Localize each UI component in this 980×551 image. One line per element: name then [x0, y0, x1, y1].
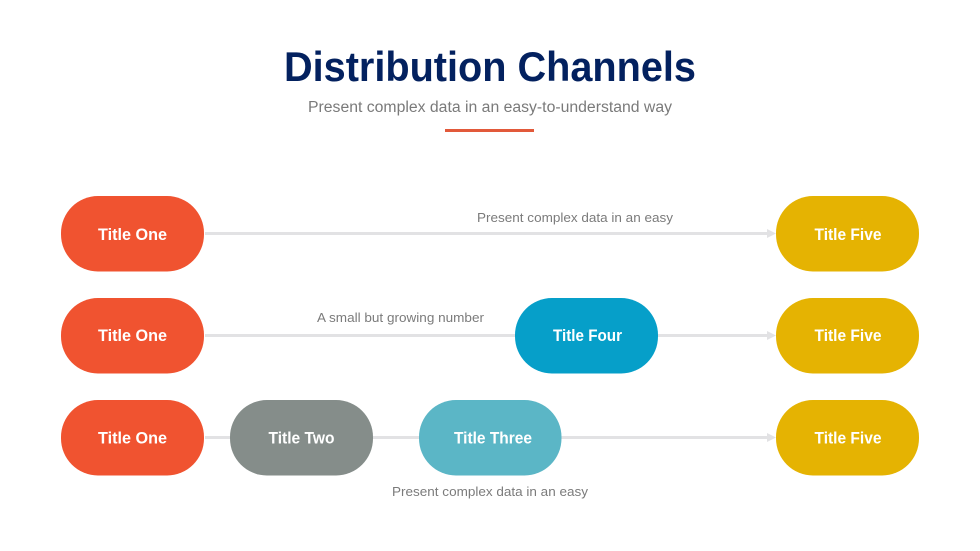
pill: row 3 title one: Title One [98, 430, 167, 448]
arrow: row 1 [205, 229, 776, 238]
title: Distribution Channels [284, 43, 696, 90]
pill: row 2 title one [61, 298, 204, 374]
pill: row 2 title one: Title One [98, 327, 167, 345]
pill: row 3 title two: Title Two [268, 430, 334, 448]
pill: row 3 title two [230, 400, 373, 476]
pill: row 3 title three [419, 400, 562, 476]
arrow: row 2 [205, 331, 776, 340]
caption: row 3: Present complex data in an easy [392, 484, 589, 499]
pill: row 3 title three: Title Three [454, 430, 532, 448]
pill: row 1 title one [61, 196, 204, 272]
subtitle: Present complex data in an easy-to-understand way [308, 99, 672, 116]
pill: row 3 title one [61, 400, 204, 476]
caption: row 2: A small but growing number [317, 310, 485, 325]
pill: row 1 title one: Title One [98, 226, 167, 244]
pill: row 3 title five: Title Five [814, 430, 882, 448]
caption: row 1: Present complex data in an easy [477, 210, 674, 225]
pill: row 2 title four: Title Four [553, 327, 623, 345]
row 1: direct channel [61, 196, 919, 272]
arrow: row 3 [205, 433, 776, 442]
pill: row 2 title five: Title Five [814, 327, 882, 345]
pill: row 2 title four [515, 298, 658, 374]
pill: row 1 title five [776, 196, 919, 272]
row 3: channel through titles two and three [61, 400, 919, 499]
pill: row 3 title five [776, 400, 919, 476]
title underline accent [445, 129, 534, 132]
pill: row 2 title five [776, 298, 919, 374]
pill: row 1 title five: Title Five [814, 226, 882, 244]
row 2: channel through title four [61, 298, 919, 374]
